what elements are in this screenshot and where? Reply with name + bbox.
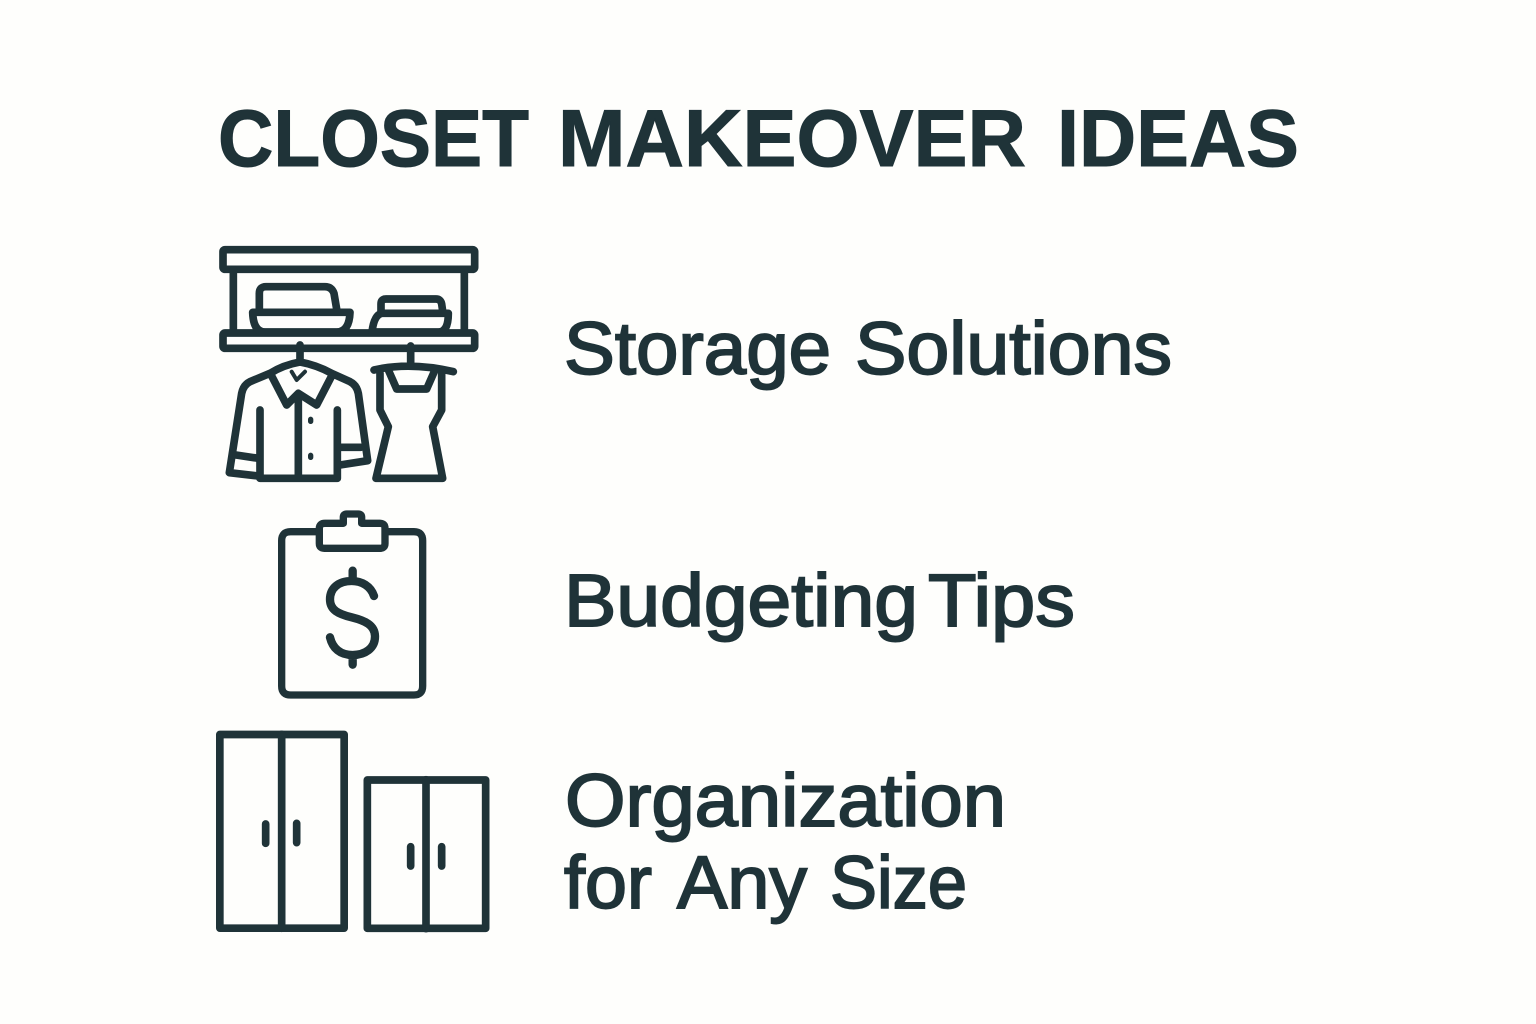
folded stack: large [253,287,350,332]
label: Organization for Any Size: Size [830,841,967,924]
label: Storage Solutions [564,307,1172,390]
title: CLOSET [218,94,529,184]
dress on hanger [374,346,453,478]
icon: shelf with folded clothes and hanging garments [223,250,475,478]
label: Budgeting Tips: Budgeting [564,559,918,642]
label: Organization for Any Size: Any [677,841,807,924]
label: Organization for Any Size [564,759,1006,924]
dollar sign [330,571,375,665]
small wardrobe [367,780,486,929]
title: IDEAS [1057,94,1299,184]
label: Storage Solutions: Storage [564,307,831,390]
shelf unit [223,250,475,348]
label: Organization for Any Size: Organization [565,759,1006,842]
label: Budgeting Tips: Tips [928,559,1075,642]
large wardrobe [220,734,344,928]
icon: two wardrobes [220,734,486,929]
title: MAKEOVER [558,94,1026,184]
label: Storage Solutions: Solutions [855,307,1172,390]
shirt on hanger [229,345,368,478]
icon: clipboard with dollar sign [282,514,423,695]
title [218,94,1299,184]
folded stack: small [372,299,448,332]
clipboard clip [319,514,385,548]
label: Organization for Any Size: for [564,841,652,924]
clipboard board [282,532,423,695]
label: Budgeting Tips [564,559,1075,642]
